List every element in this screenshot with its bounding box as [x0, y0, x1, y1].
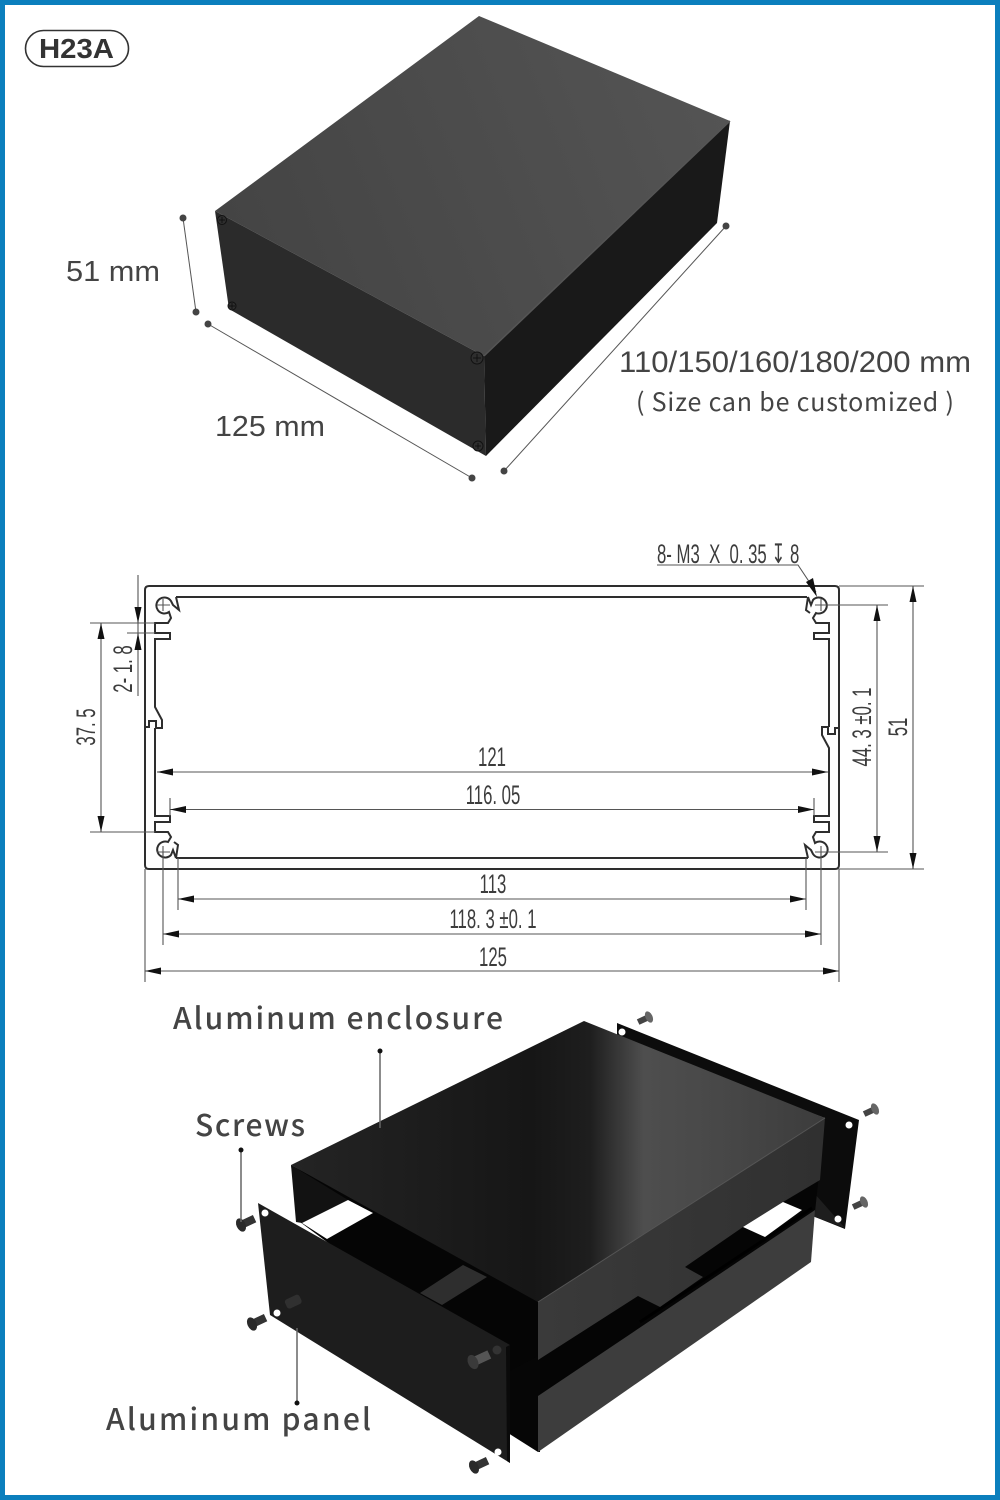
front panel [258, 1203, 510, 1463]
screw: front right lower [467, 1454, 491, 1475]
model badge: H23A [26, 30, 128, 66]
profile left inner contour [145, 597, 179, 858]
dimension: 116.05: 116. 05 [466, 780, 520, 810]
thread callout: 8-M3 [657, 539, 817, 597]
screw hole centre marks [157, 599, 828, 858]
dimension line: width 125 mm [204, 320, 476, 482]
dimension line: length options: ( Size can be customized ) [636, 383, 954, 419]
dimension line: width 125 mm: 125 mm [215, 411, 325, 443]
screw: rear right upper [862, 1102, 881, 1120]
technical drawing: extrusion profile [71, 539, 924, 982]
profile inner top and bottom walls [176, 597, 808, 858]
rear panel [617, 1023, 859, 1229]
closed enclosure 3D view [215, 16, 730, 456]
screw: front upper [234, 1212, 258, 1233]
dimension: 51: 51 [883, 718, 913, 736]
dimension: 113: 113 [480, 869, 506, 899]
dimension: 118.3 tolerance: 118. 3 ±0. 1 [449, 904, 537, 934]
dimension: 125: 125 [479, 942, 507, 972]
callout: Screws: Screws [195, 1101, 305, 1145]
screw: rear top [636, 1010, 655, 1028]
screw: front right upper [465, 1348, 492, 1371]
callout: Aluminum panel [106, 1328, 371, 1439]
dimension: 113 [178, 858, 806, 910]
dimension: 121 [157, 742, 828, 776]
dimension: 44.3 tolerance [821, 605, 888, 852]
enclosure upper body [291, 1021, 825, 1360]
exploded enclosure view [234, 1010, 881, 1475]
dimension: 118.3 tolerance [163, 852, 821, 945]
dimension line: length options [500, 222, 971, 474]
profile right inner contour [805, 597, 839, 858]
screw: rear right lower [851, 1195, 870, 1213]
thread callout: 8-M3: 8- M3 X 0. 35 ↧ 8 [657, 539, 799, 569]
dimension: 51 [839, 586, 924, 869]
dimension: 37.5: 37. 5 [71, 708, 101, 746]
callout: Aluminum enclosure [173, 994, 503, 1128]
dimension: 2-1.8 wall [108, 575, 155, 696]
internal cavity in black [291, 1118, 825, 1402]
dimension: 37.5 [71, 623, 155, 832]
dimension: 116.05 [170, 780, 814, 816]
model badge: H23A: H23A [39, 33, 114, 64]
dimension: 44.3 tolerance: 44. 3 ±0. 1 [847, 688, 877, 766]
dimension: 121: 121 [478, 742, 506, 772]
dimension line: height 51 mm [66, 214, 200, 316]
dimension: 2-1.8 wall: 2- 1. 8 [108, 645, 138, 693]
dimension: 125 [145, 869, 839, 982]
dimension line: length options: 110/150/160/180/200 mm [619, 346, 971, 379]
callout: Screws [195, 1101, 305, 1222]
screw: front lower [245, 1311, 269, 1332]
screw: through panel [284, 1294, 303, 1310]
callout: Aluminum enclosure: Aluminum enclosure [173, 994, 503, 1038]
dimension line: height 51 mm: 51 mm [66, 256, 160, 288]
lower body wall [508, 1208, 815, 1452]
callout: Aluminum panel: Aluminum panel [106, 1395, 371, 1439]
profile outer shell [145, 586, 839, 869]
